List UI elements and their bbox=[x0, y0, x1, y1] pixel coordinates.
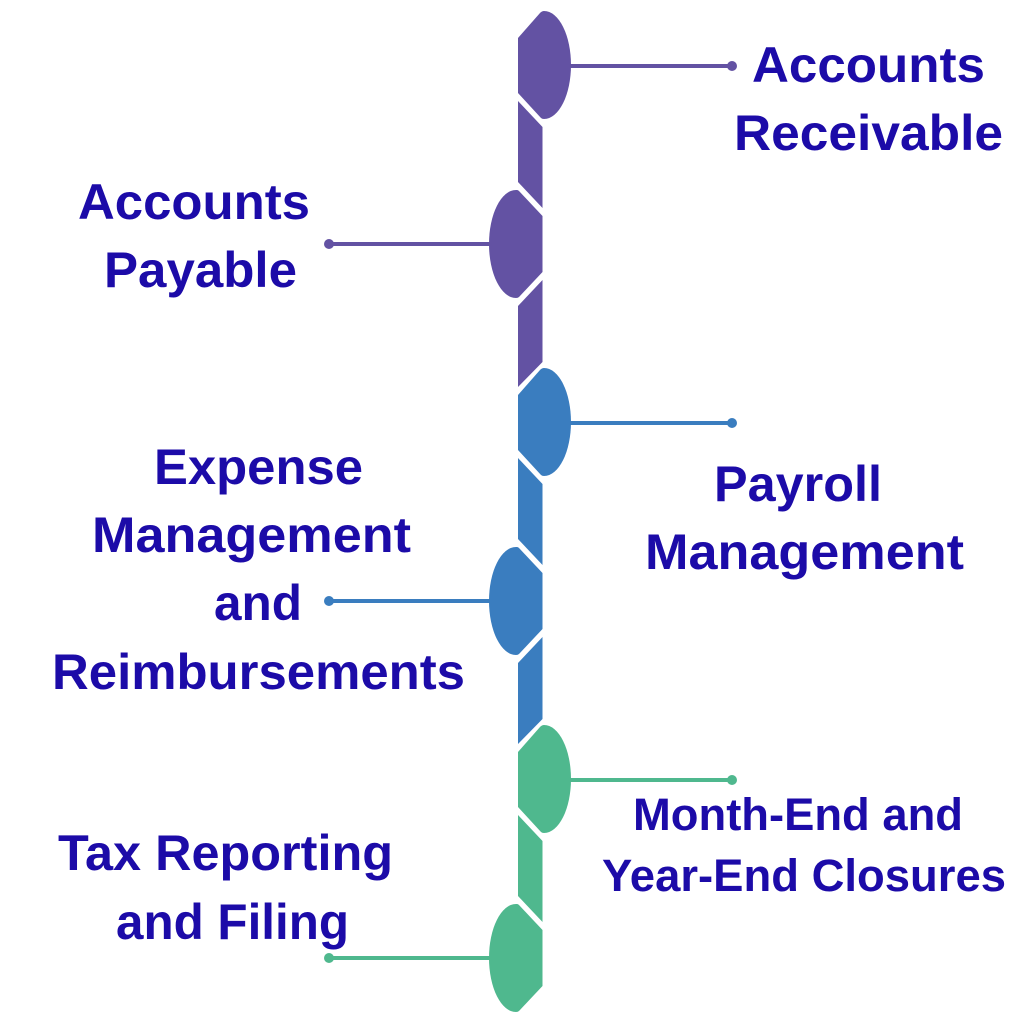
leader line bbox=[329, 956, 490, 960]
label: Payroll bbox=[714, 456, 882, 512]
item 3: Payroll Management bbox=[518, 368, 964, 580]
label: Receivable bbox=[734, 105, 1003, 161]
vertical spine: blue section bbox=[518, 458, 542, 744]
label: Payable bbox=[104, 242, 297, 298]
node: purple right bbox=[518, 11, 571, 119]
item 4: Expense Management and Reimbursements bbox=[52, 439, 542, 700]
connector: purple upper bbox=[518, 101, 542, 208]
leader dot bbox=[324, 239, 334, 249]
connector: blue lower bbox=[518, 637, 542, 744]
connector: green bbox=[518, 815, 542, 922]
label: Accounts bbox=[78, 174, 310, 230]
label: Year-End Closures bbox=[602, 850, 1006, 901]
label: Accounts bbox=[752, 37, 985, 93]
item 5: Month-End and Year-End Closures bbox=[518, 725, 1006, 901]
connector: purple lower bbox=[518, 280, 542, 387]
label: Expense bbox=[154, 439, 363, 495]
label: Month-End and bbox=[633, 789, 963, 840]
leader dot bbox=[727, 61, 737, 71]
vertical spine: purple section bbox=[518, 101, 542, 387]
leader dot bbox=[727, 775, 737, 785]
node: purple left bbox=[489, 190, 542, 298]
label: Tax Reporting bbox=[58, 825, 393, 881]
leader dot bbox=[727, 418, 737, 428]
node: blue left bbox=[489, 547, 542, 655]
node: green left bbox=[489, 904, 542, 1012]
item 1: Accounts Receivable bbox=[518, 11, 1003, 161]
node: blue right bbox=[518, 368, 571, 476]
leader line bbox=[570, 421, 732, 425]
item 2: Accounts Payable bbox=[78, 174, 542, 298]
leader dot bbox=[324, 596, 334, 606]
leader line bbox=[570, 778, 732, 782]
connector: blue upper bbox=[518, 458, 542, 565]
label: and bbox=[214, 575, 302, 631]
leader line bbox=[329, 599, 490, 603]
label: Management bbox=[92, 507, 411, 563]
node: green right bbox=[518, 725, 571, 833]
label: Management bbox=[645, 524, 964, 580]
item 6: Tax Reporting and Filing bbox=[58, 825, 542, 1012]
label: and Filing bbox=[116, 894, 349, 950]
leader line bbox=[329, 242, 490, 246]
leader line bbox=[570, 64, 732, 68]
leader dot bbox=[324, 953, 334, 963]
label: Reimbursements bbox=[52, 644, 465, 700]
